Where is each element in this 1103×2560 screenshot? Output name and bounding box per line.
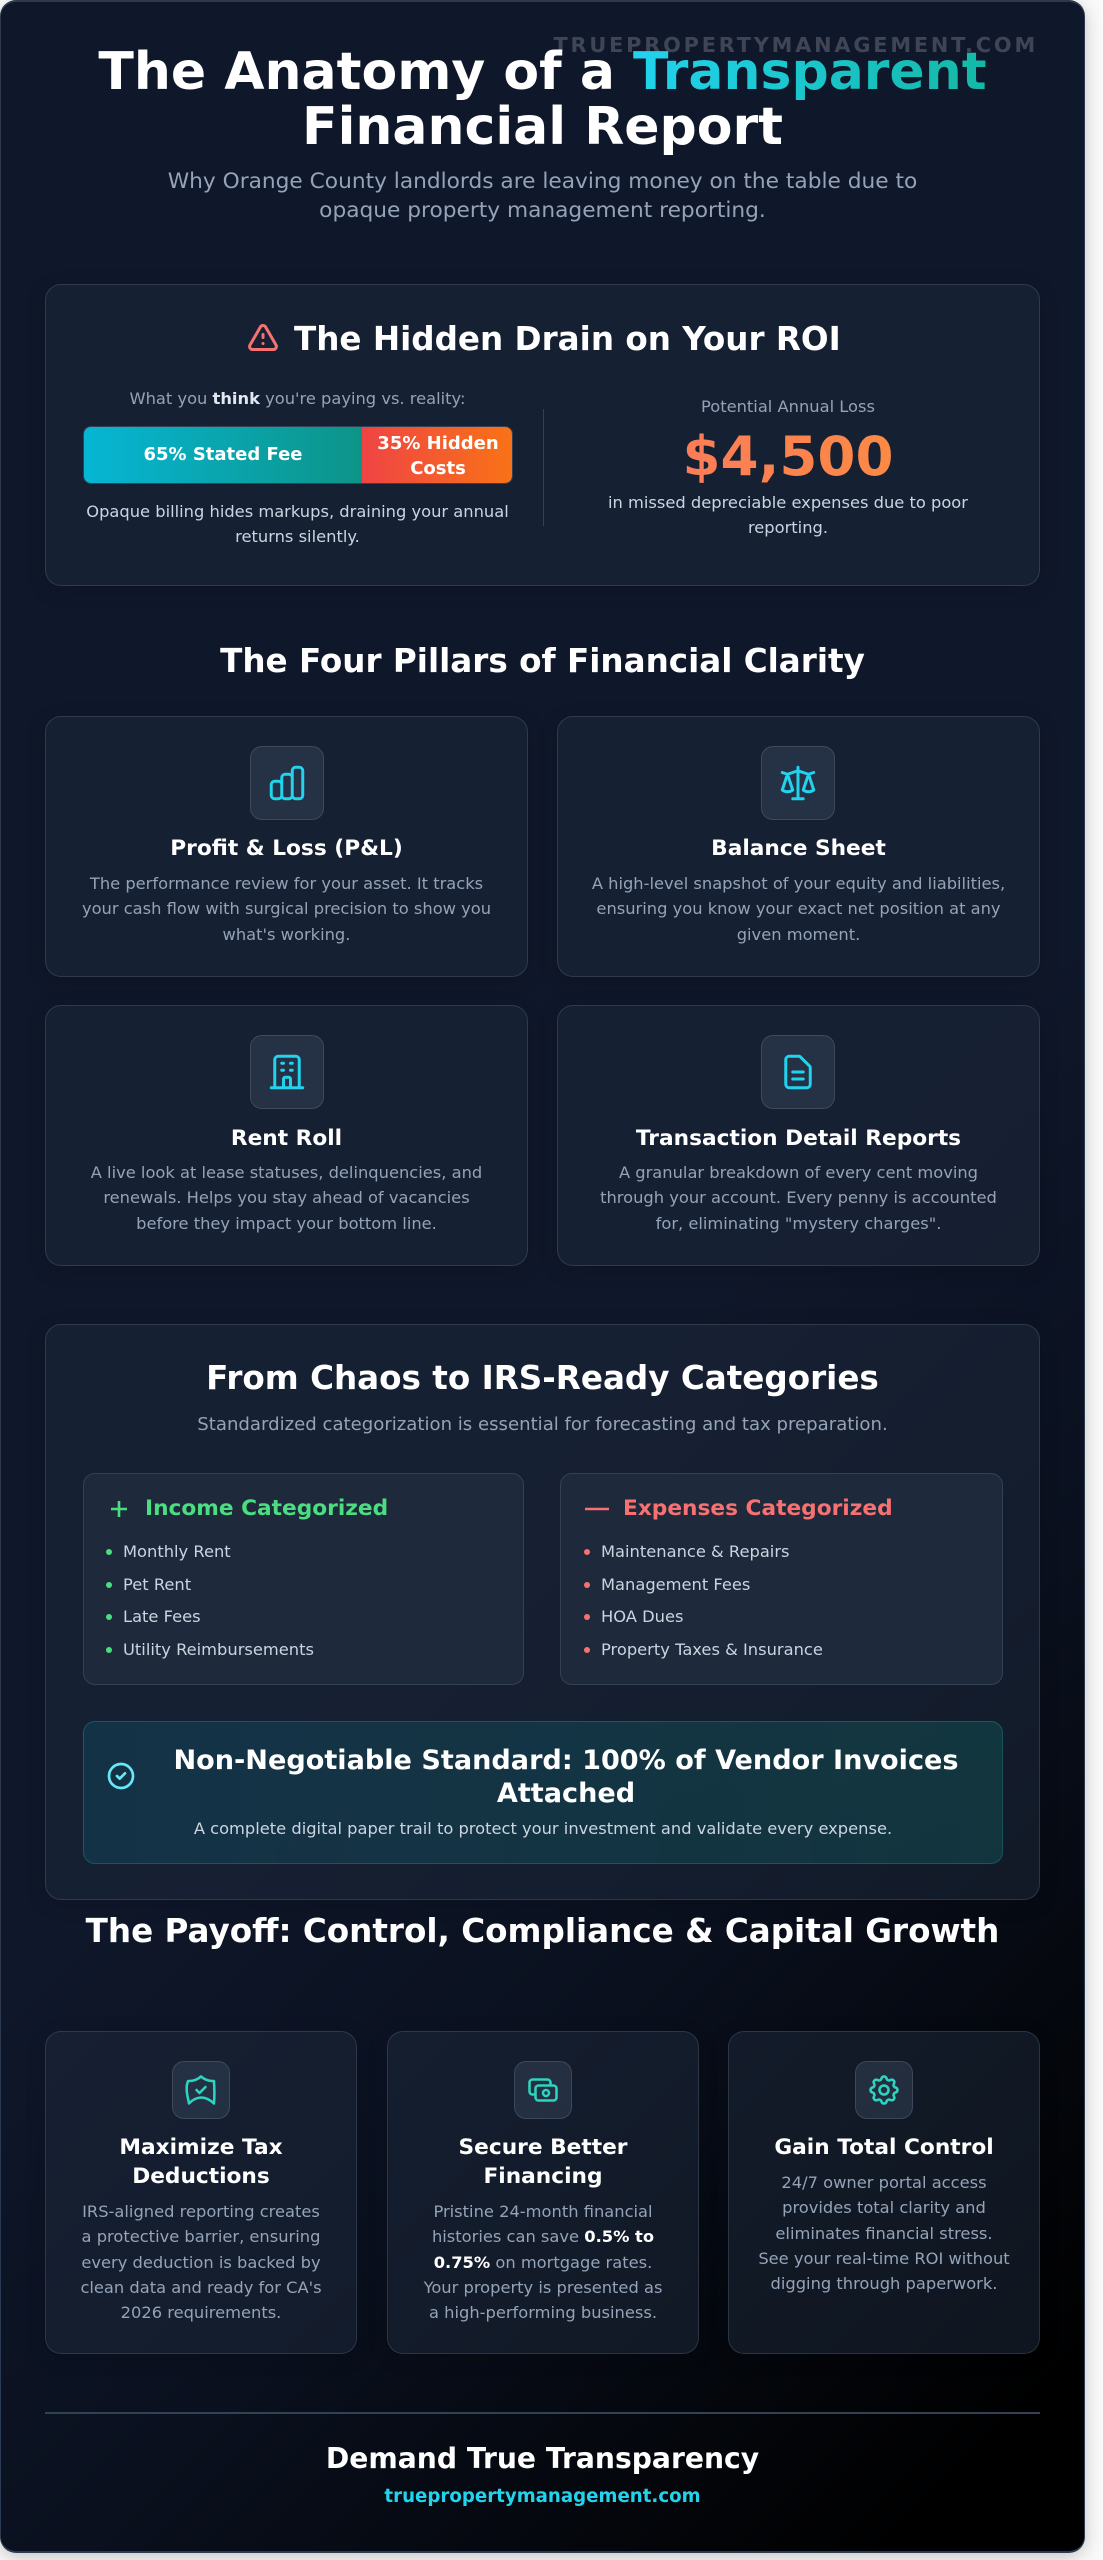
description bbox=[758, 2173, 1010, 2293]
bar segment: hidden costs: 35% Hidden bbox=[377, 433, 499, 454]
bar segment: stated fee bbox=[84, 427, 362, 485]
description: through your account. Every penny is accounted bbox=[600, 1188, 997, 1207]
description: for, eliminating "mystery charges". bbox=[656, 1214, 941, 1233]
description: A granular breakdown of every cent moving bbox=[619, 1163, 978, 1182]
icon: scale bbox=[761, 746, 835, 820]
heading: From Chaos to IRS-Ready Categories bbox=[206, 1359, 879, 1397]
heading: Maximize Tax bbox=[119, 2135, 283, 2160]
description: A live look at lease statuses, delinquencies, and bbox=[91, 1163, 482, 1182]
icon: chart bbox=[250, 746, 324, 820]
heading: income: Income Categorized bbox=[145, 1496, 388, 1521]
description: clean data and ready for CA's bbox=[80, 2278, 322, 2297]
panel: better financing bbox=[387, 2031, 699, 2354]
description bbox=[592, 874, 1005, 944]
panel: chaos to categories bbox=[45, 1324, 1040, 1900]
divider: footer bbox=[45, 2412, 1040, 2414]
heading: Balance Sheet bbox=[711, 836, 886, 861]
list: expenses bbox=[584, 1542, 823, 1658]
callout: invoices bbox=[83, 1721, 1003, 1864]
panel: hidden drain bbox=[45, 284, 1040, 586]
heading: Financing bbox=[483, 2164, 603, 2189]
icon: document bbox=[761, 1035, 835, 1109]
heading: Transaction Detail Reports bbox=[636, 1126, 961, 1151]
description bbox=[80, 2202, 322, 2322]
panel: balance sheet bbox=[557, 716, 1040, 977]
title: Financial Report bbox=[302, 97, 783, 157]
description: 0.75% on mortgage rates. bbox=[434, 2253, 652, 2272]
description: what's working. bbox=[223, 925, 350, 944]
description: histories can save 0.5% to bbox=[432, 2227, 654, 2246]
panel: total control bbox=[728, 2031, 1040, 2354]
watermark: TRUEPROPERTYMANAGEMENT.COM bbox=[553, 33, 1038, 57]
heading: callout: Non-Negotiable Standard: 100% of Vendor Invoices bbox=[173, 1745, 959, 1776]
icon: cash bbox=[514, 2061, 572, 2119]
icon: shield bbox=[172, 2061, 230, 2119]
heading: Rent Roll bbox=[231, 1126, 342, 1151]
bar segment: hidden costs bbox=[362, 427, 514, 485]
description bbox=[600, 1163, 997, 1233]
icon: gear bbox=[855, 2061, 913, 2119]
list: income: Late Fees bbox=[123, 1607, 201, 1626]
panel: rent roll bbox=[45, 1005, 528, 1266]
heading: Gain Total Control bbox=[774, 2135, 994, 2160]
description: IRS-aligned reporting creates bbox=[82, 2202, 320, 2221]
title bbox=[98, 42, 987, 157]
description: ensuring you know your exact net position at any bbox=[596, 899, 1001, 918]
list: expenses: Property Taxes & Insurance bbox=[601, 1640, 823, 1658]
note: missed expenses bbox=[608, 493, 968, 537]
panel: expenses bbox=[560, 1473, 1003, 1685]
title: The Anatomy of a Transparent bbox=[98, 42, 987, 102]
note: missed expenses: in missed depreciable expenses due to poor bbox=[608, 493, 968, 512]
description: A high-level snapshot of your equity and liabilities, bbox=[592, 874, 1005, 893]
description: renewals. Helps you stay ahead of vacancies bbox=[103, 1188, 470, 1207]
heading bbox=[459, 2135, 628, 2189]
panel: profit and loss bbox=[45, 716, 528, 977]
heading: Secure Better bbox=[459, 2135, 627, 2160]
description: provides total clarity and bbox=[782, 2198, 986, 2217]
description: 24/7 owner portal access bbox=[781, 2173, 987, 2192]
description: your cash flow with surgical precision to show you bbox=[82, 899, 491, 918]
description: eliminates financial stress. bbox=[775, 2224, 993, 2243]
subtitle: opaque property management reporting. bbox=[319, 198, 766, 223]
divider bbox=[543, 409, 544, 526]
description: Your property is presented as bbox=[424, 2278, 662, 2297]
icon: building bbox=[250, 1035, 324, 1109]
heading: Profit & Loss (P&L) bbox=[170, 836, 403, 861]
heading: callout: Attached bbox=[497, 1778, 635, 1809]
description: every deduction is backed by bbox=[81, 2253, 321, 2272]
description: given moment. bbox=[737, 925, 860, 944]
description: See your real-time ROI without bbox=[758, 2249, 1010, 2268]
description bbox=[424, 2202, 662, 2322]
stacked bar: fee split bbox=[83, 426, 513, 484]
list: income: Pet Rent bbox=[123, 1574, 191, 1594]
list: expenses: HOA Dues bbox=[601, 1607, 683, 1626]
list: income: Utility Reimbursements bbox=[123, 1640, 314, 1658]
description: before they impact your bottom line. bbox=[136, 1214, 437, 1233]
list: income bbox=[106, 1542, 314, 1658]
list: expenses: Maintenance & Repairs bbox=[601, 1542, 790, 1561]
icon: plus bbox=[111, 1501, 127, 1517]
panel: transaction detail bbox=[557, 1005, 1040, 1266]
heading: hidden drain: The Hidden Drain on Your ROI bbox=[294, 320, 841, 358]
description: Pristine 24-month financial bbox=[433, 2202, 653, 2221]
heading: payoff: The Payoff: Control, Compliance & Capital Growth bbox=[86, 1912, 999, 1950]
description: a protective barrier, ensuring bbox=[82, 2227, 320, 2246]
bar segment: hidden costs: Costs bbox=[410, 458, 466, 479]
description: The performance review for your asset. It tracks bbox=[90, 874, 483, 893]
note: missed expenses: reporting. bbox=[748, 518, 828, 537]
icon: minus bbox=[585, 1508, 609, 1510]
subtitle bbox=[168, 169, 917, 223]
note: opaque billing: Opaque billing hides markups, draining your annual bbox=[86, 502, 509, 521]
footer heading: Demand True Transparency bbox=[326, 2442, 759, 2475]
subheading: Standardized categorization is essential for forecasting and tax preparation. bbox=[197, 1414, 888, 1435]
icon: check circle bbox=[108, 1762, 134, 1790]
description bbox=[91, 1163, 482, 1233]
note: opaque billing bbox=[86, 502, 509, 546]
text: callout: A complete digital paper trail to protect your investment and validate every expense. bbox=[194, 1819, 892, 1838]
label: potential loss: Potential Annual Loss bbox=[701, 397, 875, 416]
description: a high-performing business. bbox=[429, 2303, 657, 2322]
list: income: Monthly Rent bbox=[123, 1542, 231, 1561]
heading: expenses: Expenses Categorized bbox=[623, 1496, 893, 1521]
icon: warning triangle bbox=[248, 324, 278, 351]
bar segment: stated fee: 65% Stated Fee bbox=[143, 444, 302, 465]
heading: Deductions bbox=[132, 2164, 270, 2189]
description: 2026 requirements. bbox=[121, 2303, 281, 2322]
panel: maximize deductions bbox=[45, 2031, 357, 2354]
description bbox=[82, 874, 491, 944]
list: expenses: Management Fees bbox=[601, 1574, 750, 1594]
stat: annual loss: $4,500 bbox=[682, 424, 894, 488]
panel: income bbox=[83, 1473, 524, 1685]
heading: callout bbox=[173, 1745, 959, 1809]
note: opaque billing: returns silently. bbox=[235, 527, 360, 546]
heading bbox=[119, 2135, 283, 2189]
caption: think vs reality: What you think you're paying vs. reality: bbox=[130, 389, 465, 408]
footer link: truepropertymanagement.com bbox=[384, 2486, 701, 2507]
heading: four pillars: The Four Pillars of Financial Clarity bbox=[220, 642, 865, 680]
description: digging through paperwork. bbox=[771, 2274, 997, 2293]
subtitle: Why Orange County landlords are leaving money on the table due to bbox=[168, 169, 917, 194]
